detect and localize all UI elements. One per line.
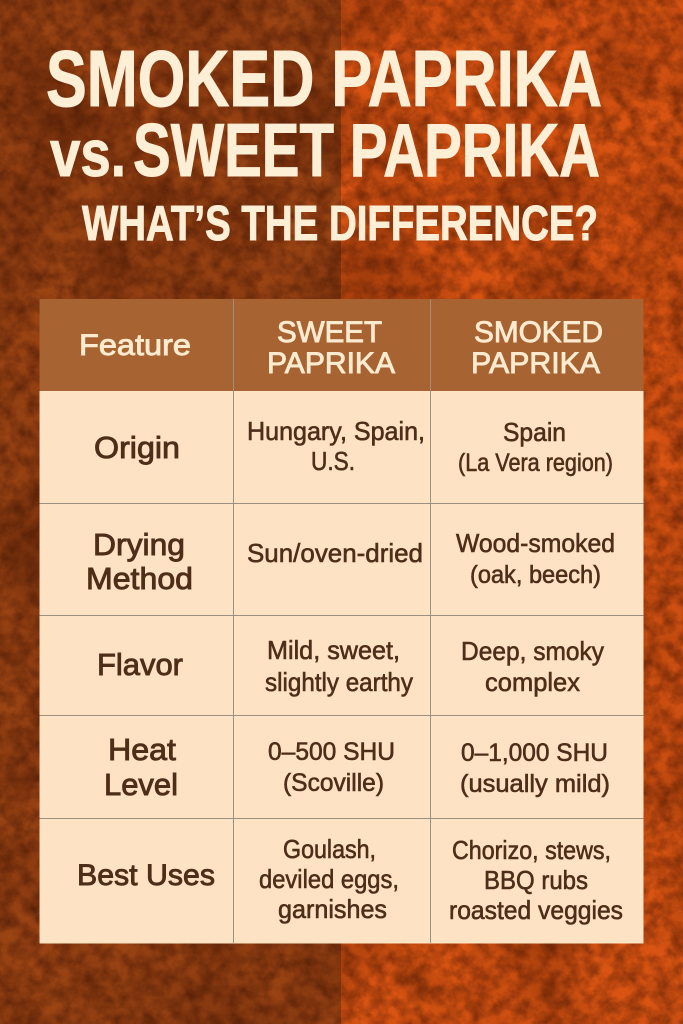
row: best uses: Goulash, <box>283 834 376 864</box>
row: heat level: 0–1,000 SHU <box>461 739 608 767</box>
header: feature: Feature <box>79 329 191 362</box>
header: smoked paprika: PAPRIKA <box>471 347 600 380</box>
row: best uses: deviled eggs, <box>259 864 399 894</box>
row: drying method: Sun/oven-dried <box>247 538 423 568</box>
row: heat level: Heat <box>108 732 176 767</box>
row: flavor: complex <box>485 667 580 697</box>
row: heat level: (Scoville) <box>283 769 384 797</box>
row: flavor: Flavor <box>97 647 183 682</box>
header: sweet paprika: PAPRIKA <box>267 347 395 380</box>
row: best uses <box>77 834 623 925</box>
row: drying method <box>86 527 615 596</box>
grid lines <box>40 299 644 943</box>
row: heat level: 0–500 SHU <box>268 738 395 766</box>
header: sweet paprika: SWEET <box>277 316 382 349</box>
row: drying method: Wood-smoked <box>456 528 615 558</box>
row: drying method: Method <box>86 561 193 596</box>
row: flavor: Deep, smoky <box>461 636 604 666</box>
header: smoked paprika <box>471 316 603 380</box>
row: origin <box>94 416 613 477</box>
header: smoked paprika: SMOKED <box>474 316 603 349</box>
row: best uses: BBQ rubs <box>484 865 588 895</box>
row: flavor: slightly earthy <box>265 667 413 697</box>
row: origin: (La Vera region) <box>458 449 613 477</box>
row: origin: Origin <box>94 430 180 465</box>
row: heat level: (usually mild) <box>460 770 610 798</box>
row: flavor: Mild, sweet, <box>267 635 400 665</box>
row: best uses: Chorizo, stews, <box>452 835 611 865</box>
table body <box>40 391 644 944</box>
row: best uses: garnishes <box>278 894 387 924</box>
row: heat level <box>104 732 610 802</box>
table header band <box>40 299 644 391</box>
row: best uses: roasted veggies <box>449 895 623 925</box>
row: origin: Hungary, Spain, <box>247 416 425 446</box>
title <box>46 34 602 251</box>
header: sweet paprika <box>267 316 395 380</box>
title line 2: vs.: vs. <box>50 116 126 190</box>
row: origin: U.S. <box>311 446 355 476</box>
row: drying method: (oak, beech) <box>470 561 601 589</box>
comparison table <box>40 299 644 944</box>
row: flavor <box>97 635 604 697</box>
row: heat level: Level <box>104 767 178 802</box>
row: origin: Spain <box>503 417 566 447</box>
row: best uses: Best Uses <box>77 859 215 892</box>
row: drying method: Drying <box>93 527 185 562</box>
